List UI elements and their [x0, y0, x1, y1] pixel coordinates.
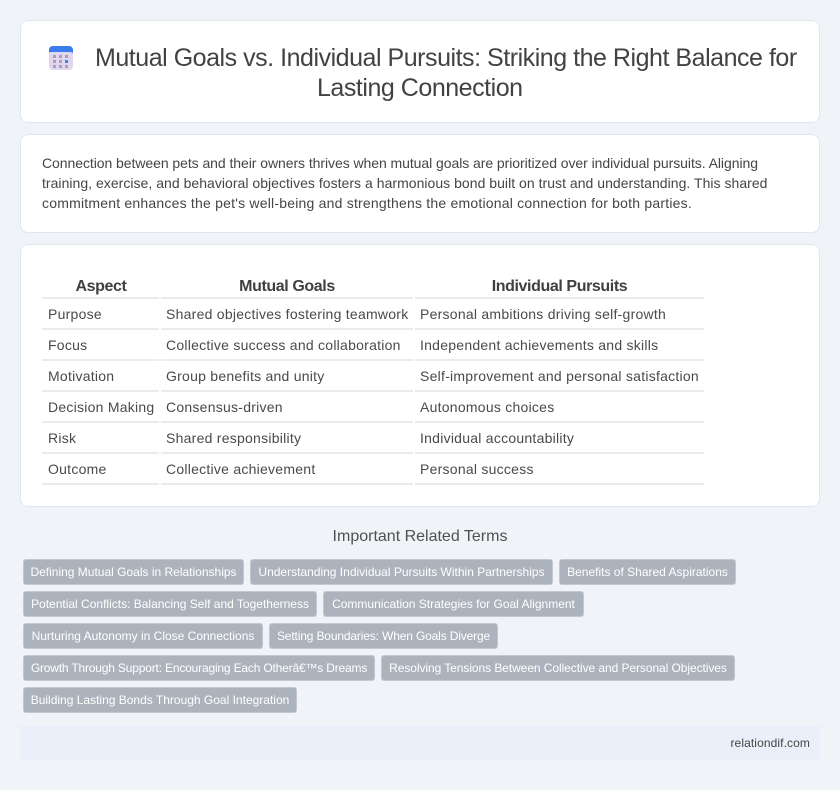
table rows [42, 297, 704, 485]
table rows: Shared responsibility [166, 430, 301, 446]
intro text: Connection between pets and their owners thrives when mutual goals are prioritized over individual pursuits. Aligning [42, 155, 758, 171]
tag list: Potential Conflicts: Balancing Self and Togetherness [31, 597, 309, 611]
table rows: Risk [48, 430, 76, 446]
table rows: Purpose [48, 306, 102, 322]
table rows: Individual accountability [420, 430, 574, 446]
table header: mutual goals: Mutual Goals [239, 278, 335, 295]
tag list: Setting Boundaries: When Goals Diverge [277, 629, 490, 643]
table rows: Autonomous choices [420, 399, 554, 415]
title: Mutual Goals vs. Individual Pursuits: Striking the Right Balance for [95, 44, 797, 72]
table rows: Personal success [420, 461, 534, 477]
table rows: Collective success and collaboration [166, 337, 401, 353]
tag list: Growth Through Support: Encouraging Each Otherâ€™s Dreams [31, 661, 367, 675]
table rows: Independent achievements and skills [420, 337, 658, 353]
tag list: Understanding Individual Pursuits Within Partnerships [258, 565, 545, 579]
table rows: Personal ambitions driving self-growth [420, 306, 666, 322]
title [95, 44, 797, 102]
table rows: Group benefits and unity [166, 368, 325, 384]
intro text: commitment enhances the pet's well-being and strengthens the emotional connection for both parties. [42, 195, 692, 211]
table rows: Outcome [48, 461, 107, 477]
panel: header [20, 20, 820, 123]
footer source: relationdif.com [730, 736, 810, 750]
intro text: training, exercise, and behavioral objectives fosters a harmonious bond built on trust and understanding. This shared [42, 175, 767, 191]
heading: related terms: Important Related Terms [333, 528, 507, 545]
panel: intro paragraph [20, 134, 820, 233]
table rows: Shared objectives fostering teamwork [166, 306, 408, 322]
tag list: Nurturing Autonomy in Close Connections [32, 629, 254, 643]
title: Lasting Connection [317, 74, 523, 102]
table rows: Collective achievement [166, 461, 315, 477]
table header: aspect: Aspect [76, 278, 126, 295]
icon: calendar [49, 46, 73, 70]
tag list: Resolving Tensions Between Collective and Personal Objectives [389, 661, 727, 675]
table rows: Consensus-driven [166, 399, 283, 415]
tag list: Building Lasting Bonds Through Goal Integration [31, 693, 289, 707]
panel: comparison table [20, 244, 820, 507]
tag list: Defining Mutual Goals in Relationships [30, 565, 237, 579]
footer bar [20, 726, 820, 760]
table header: individual pursuits: Individual Pursuits [492, 278, 627, 295]
tag list: Communication Strategies for Goal Alignment [332, 597, 575, 611]
table rows: Decision Making [48, 399, 154, 415]
intro text [42, 155, 767, 211]
table rows: Motivation [48, 368, 114, 384]
table rows: Self-improvement and personal satisfaction [420, 368, 699, 384]
tag list [23, 559, 736, 713]
table rows: Focus [48, 337, 87, 353]
tag list: Benefits of Shared Aspirations [567, 565, 728, 579]
